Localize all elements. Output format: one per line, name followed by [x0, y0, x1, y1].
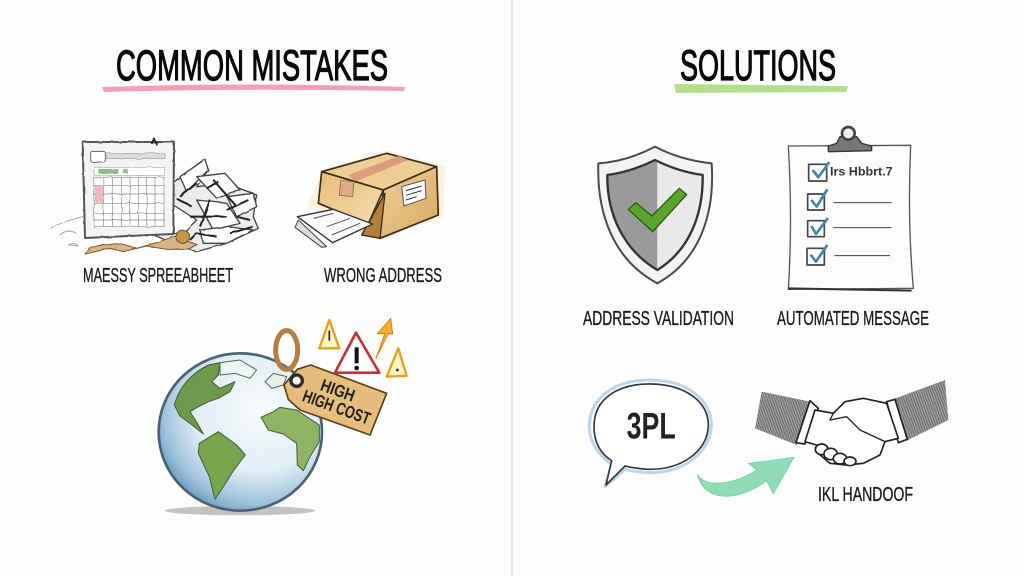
icon: open box	[295, 150, 445, 247]
label: wrong address: WRONG ADDRESS	[324, 265, 442, 287]
panel: common mistakes	[50, 42, 445, 515]
divider	[511, 0, 513, 576]
icon: clipboard checklist	[788, 127, 913, 291]
icon: messy spreadsheet	[50, 138, 258, 254]
box top	[322, 153, 437, 190]
spreadsheet sheet	[83, 142, 174, 238]
cost tag: HIGH COST	[300, 386, 374, 429]
heading: common mistakes	[102, 42, 405, 92]
hands	[805, 398, 898, 465]
cost tag	[284, 365, 387, 435]
panel: solutions	[583, 42, 948, 506]
arrow: green handoff	[697, 457, 794, 496]
grid	[94, 177, 164, 227]
tan debris	[85, 235, 197, 254]
icon: clipboard checklist: Irs Hbbrt.7	[830, 165, 893, 179]
globe	[159, 353, 322, 511]
box flap	[318, 172, 383, 224]
clip	[828, 137, 872, 152]
land: africa	[261, 407, 319, 471]
heading: common mistakes: COMMON MISTAKES	[116, 42, 388, 90]
icon: globe with cost tag	[159, 318, 407, 515]
label: automated message: AUTOMATED MESSAGE	[777, 308, 929, 330]
icon: 3PL speech bubble	[589, 380, 711, 487]
ring	[276, 331, 298, 369]
checkboxes	[807, 164, 827, 265]
label: address validation: ADDRESS VALIDATION	[583, 308, 734, 330]
heading: solutions	[674, 42, 848, 93]
land: north america	[174, 363, 235, 434]
land: south america	[198, 432, 245, 499]
label: messy spreadsheet: MAESSY SPREEABHEET	[83, 265, 233, 287]
cost tag: HIGH	[318, 375, 358, 406]
right sleeve	[887, 380, 948, 441]
icon: shield	[598, 147, 712, 283]
warning signs	[319, 318, 407, 377]
label: handoff: IKL HANDOOF	[818, 484, 913, 506]
left sleeve	[755, 392, 810, 445]
shadow	[165, 506, 315, 515]
papers	[295, 220, 327, 247]
check mark	[628, 188, 687, 232]
icon: handshake	[755, 380, 948, 466]
icon: 3PL speech bubble: 3PL	[627, 404, 676, 446]
box right face	[380, 167, 438, 238]
paper pile	[50, 159, 258, 252]
heading: solutions: SOLUTIONS	[680, 42, 836, 90]
